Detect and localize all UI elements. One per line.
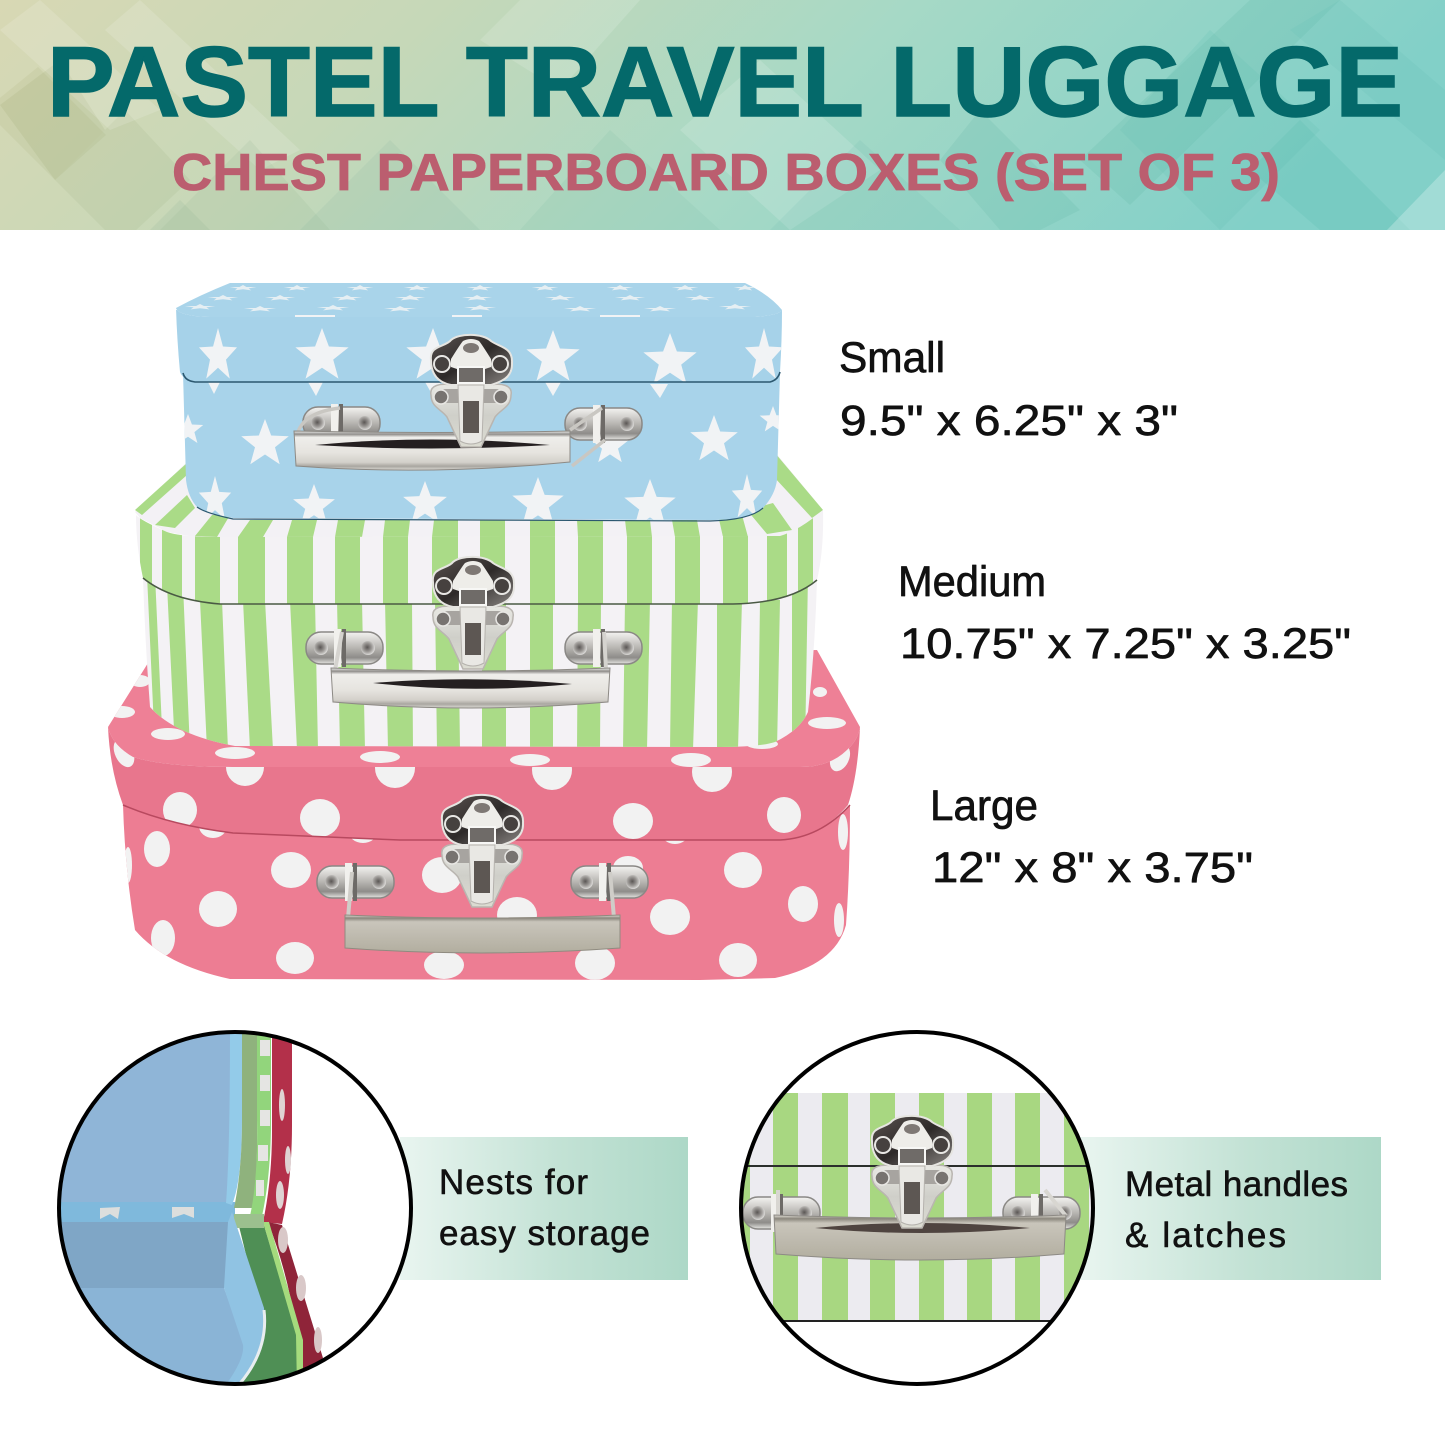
small suitcase hardware xyxy=(294,335,642,470)
title: PASTEL TRAVEL LUGGAGE xyxy=(47,26,1403,137)
header banner xyxy=(0,0,1445,245)
callout strip: nesting: easy storage xyxy=(439,1214,650,1253)
circle detail: nested suitcases xyxy=(55,1030,411,1390)
size label: large: Large xyxy=(930,782,1038,830)
medium suitcase top surface xyxy=(135,452,823,538)
size label: small: Small xyxy=(839,334,945,382)
callout strip: hardware: & latches xyxy=(1125,1216,1286,1255)
size label: large xyxy=(930,782,1253,892)
callout strip: nesting xyxy=(400,1137,688,1280)
size label: medium: 10.75" x 7.25" x 3.25" xyxy=(900,620,1351,668)
size label: small xyxy=(839,334,1178,445)
size label: medium xyxy=(898,558,1351,668)
subtitle: CHEST PAPERBOARD BOXES (SET OF 3) xyxy=(172,144,1280,202)
medium suitcase hardware xyxy=(306,557,642,708)
size label: small: 9.5" x 6.25" x 3" xyxy=(840,397,1178,445)
callout strip: hardware xyxy=(1080,1137,1381,1280)
circle detail: metal handle and latch xyxy=(725,1032,1105,1384)
large pink polka dot suitcase xyxy=(100,645,870,985)
medium green striped suitcase xyxy=(130,452,830,750)
callout strip: nesting: Nests for xyxy=(439,1163,588,1202)
size label: medium: Medium xyxy=(898,558,1046,606)
large suitcase hardware xyxy=(317,795,648,953)
callout strip: hardware: Metal handles xyxy=(1125,1165,1348,1204)
small blue star suitcase xyxy=(170,280,790,528)
size label: large: 12" x 8" x 3.75" xyxy=(932,844,1253,892)
